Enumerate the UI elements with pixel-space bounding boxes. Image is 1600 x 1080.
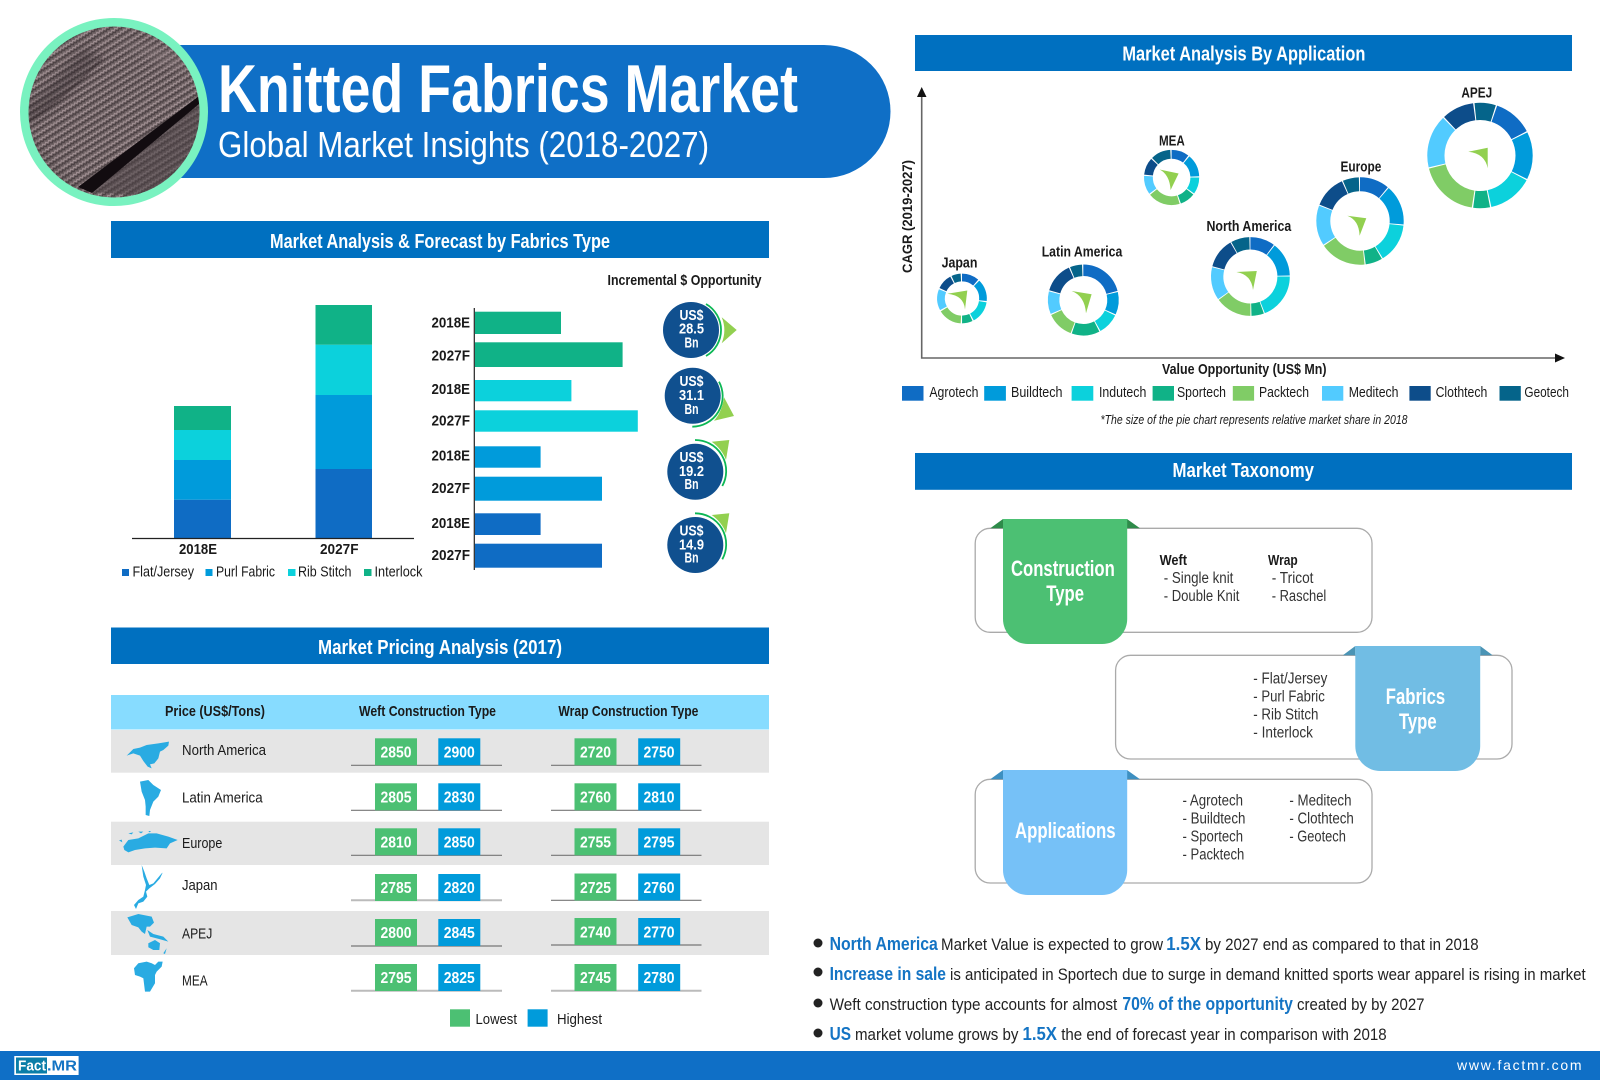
badge: US$ 19.2 Bn: 19.2 (679, 463, 704, 480)
badge: US$ 19.2 Bn (667, 440, 729, 500)
horizontal bar chart: 2027F (432, 480, 470, 497)
icon: Japan map (134, 865, 163, 909)
badge: US$ 28.5 Bn: US$ (680, 307, 704, 324)
insight 1 (814, 933, 1479, 954)
badge: US$ 19.2 Bn: US$ (680, 449, 704, 466)
insight 4 (814, 1023, 1387, 1044)
insight 4: US (830, 1023, 851, 1044)
taxonomy: construction type: Wrap (1268, 552, 1298, 569)
row: Japan: 2820 (444, 880, 475, 897)
title banner (150, 45, 890, 178)
row: MEA (134, 962, 701, 992)
horizontal bar chart: 2027F (432, 413, 470, 430)
stacked bar legend: Rib Stitch (298, 564, 352, 580)
taxonomy: construction type: Type (1046, 581, 1084, 606)
title: Knitted Fabrics Market (218, 51, 798, 127)
horizontal bar chart: 2018E (432, 448, 470, 465)
taxonomy: applications: - Buildtech (1182, 810, 1245, 827)
application legend: Indutech (1099, 384, 1146, 401)
row: North America: 2720 (580, 744, 611, 762)
key insights (814, 933, 1586, 1044)
y-axis label: CAGR (2019-2027) (900, 160, 915, 273)
taxonomy: construction type: Weft (1160, 552, 1187, 569)
row: Latin America: Latin America (182, 790, 263, 806)
application legend: Agrotech (929, 384, 978, 401)
label: Europe: Europe (1340, 158, 1381, 175)
row: Japan: Japan (182, 877, 218, 894)
subtitle: Global Market Insights (2018-2027) (218, 124, 709, 165)
taxonomy: fabrics type: Fabrics (1386, 684, 1445, 709)
donut: North America (1204, 230, 1297, 323)
row: Latin America (140, 780, 702, 816)
row: Europe: 2810 (380, 834, 412, 852)
taxonomy: applications: - Clothtech (1289, 810, 1354, 827)
taxonomy: construction type: Construction (1011, 556, 1115, 581)
taxonomy: fabrics type (1116, 646, 1512, 771)
section header: pricing analysis: Market Pricing Analysis (2017) (318, 637, 562, 659)
stacked bar chart: 2018E (179, 541, 217, 558)
row: MEA: MEA (182, 972, 208, 989)
table header row (111, 695, 769, 730)
taxonomy: fabrics type: - Rib Stitch (1253, 706, 1318, 723)
row: APEJ (111, 911, 769, 955)
row: North America: 2900 (444, 744, 475, 762)
badge: US$ 31.1 Bn (665, 368, 734, 427)
chart footnote: *The size of the pie chart represents relative market share in 2018 (1100, 413, 1408, 427)
taxonomy: applications: - Agrotech (1182, 793, 1243, 810)
horizontal bar chart: 2027F (432, 348, 470, 365)
table header row: Price (US$/Tons) (165, 703, 265, 720)
section header: by application: Market Analysis By Application (1122, 44, 1365, 66)
badge: US$ 19.2 Bn: Bn (684, 476, 698, 493)
stacked bar chart: 2027F (320, 541, 358, 558)
taxonomy: applications (975, 770, 1372, 895)
website: www.factmr.com (1456, 1057, 1582, 1073)
section header: taxonomy (915, 453, 1572, 490)
label: MEA: MEA (1159, 133, 1185, 150)
badge: US$ 14.9 Bn: Bn (684, 550, 698, 567)
taxonomy: construction type: - Raschel (1272, 588, 1326, 605)
stacked bar legend: Purl Fabric (216, 564, 275, 580)
insight 1: by 2027 end as compared to that in 2018 (1205, 935, 1479, 954)
row: Europe: Europe (182, 835, 222, 852)
section header: forecast by fabrics type: Market Analysis & Forecast by Fabrics Type (270, 231, 610, 253)
stacked bar legend: Flat/Jersey (132, 564, 194, 580)
pricing legend: Lowest (476, 1011, 518, 1028)
row: APEJ: 2800 (380, 925, 412, 942)
label: Japan: Japan (942, 255, 977, 272)
badge: US$ 14.9 Bn: 14.9 (679, 536, 704, 553)
badge: US$ 31.1 Bn: Bn (684, 401, 698, 418)
horizontal bar chart: 2018E (432, 381, 470, 398)
section header: taxonomy: Market Taxonomy (1172, 460, 1315, 482)
insight 4: market volume grows by (855, 1025, 1019, 1044)
logo: .MR (47, 1058, 77, 1074)
row: Europe (111, 822, 769, 865)
row: APEJ: 2740 (580, 924, 611, 942)
taxonomy: construction type: - Double Knit (1164, 588, 1240, 605)
insight 3: created by by 2027 (1297, 995, 1424, 1014)
insight 1: Market Value is expected to grow (941, 935, 1164, 954)
bubble chart (900, 85, 1565, 378)
taxonomy: fabrics type: - Interlock (1253, 724, 1313, 741)
chart axes (917, 87, 1565, 362)
row: MEA: 2825 (444, 970, 475, 987)
taxonomy: construction type (975, 519, 1372, 644)
insight 2: Increase in sale (830, 963, 946, 984)
row: North America: 2750 (644, 744, 675, 762)
row: Europe: 2795 (644, 834, 675, 852)
row: North America: 2850 (380, 744, 412, 762)
application legend: Geotech (1524, 384, 1569, 401)
row: Latin America: 2805 (380, 790, 412, 806)
badge: US$ 14.9 Bn: US$ (680, 523, 704, 540)
badge: US$ 28.5 Bn: 28.5 (679, 320, 704, 338)
donut: Latin America (1043, 260, 1123, 340)
stacked bar legend: Interlock (374, 564, 423, 580)
horizontal bar chart: 2018E (432, 314, 470, 332)
logo: Fact (18, 1058, 46, 1074)
pricing legend (450, 1009, 603, 1028)
icon: Europe map (119, 831, 178, 852)
row: Europe: 2850 (444, 834, 475, 852)
horizontal bar chart (432, 308, 638, 570)
insight 1: North America (830, 933, 938, 954)
row: Europe: 2755 (580, 834, 611, 852)
pricing legend: Highest (557, 1011, 603, 1028)
row: Japan: 2760 (644, 880, 675, 897)
table header row: Wrap Construction Type (558, 703, 698, 720)
row: Japan: 2725 (580, 880, 611, 897)
insight 4: the end of forecast year in comparison with 2018 (1061, 1025, 1387, 1044)
section header: forecast by fabrics type (111, 221, 769, 258)
row: North America: North America (182, 742, 267, 759)
application legend: Buildtech (1011, 384, 1062, 401)
insight 3: Weft construction type accounts for almost (830, 995, 1118, 1014)
label: APEJ: APEJ (1461, 85, 1492, 102)
row: MEA: 2780 (644, 970, 675, 987)
stacked bar chart (122, 305, 423, 580)
row: Japan: 2785 (380, 880, 412, 897)
taxonomy: construction type: - Tricot (1272, 570, 1314, 587)
insight 3: 70% of the opportunity (1122, 993, 1293, 1014)
icon: North America map (127, 742, 169, 768)
section header: pricing analysis (111, 628, 769, 664)
section header: by application (915, 35, 1572, 71)
application legend: Meditech (1349, 384, 1398, 401)
taxonomy: fabrics type: - Purl Fabric (1253, 689, 1325, 706)
row: Latin America: 2810 (644, 790, 675, 806)
taxonomy: applications: - Meditech (1289, 793, 1352, 810)
donut: Japan (932, 269, 992, 328)
bar 2018E (174, 406, 231, 538)
stacked bar legend (122, 564, 423, 580)
icon: Latin America map (140, 780, 161, 816)
row: APEJ: 2845 (444, 925, 475, 942)
row: Latin America: 2760 (580, 790, 611, 806)
taxonomy: applications: Applications (1015, 818, 1116, 843)
row: APEJ: APEJ (182, 926, 212, 943)
label: North America: North America (1206, 218, 1292, 235)
badge: US$ 14.9 Bn (667, 513, 729, 573)
horizontal bar chart: 2018E (432, 515, 470, 532)
icon: APEJ map (127, 914, 168, 954)
taxonomy: applications: - Sportech (1182, 829, 1243, 846)
badge: US$ 31.1 Bn: 31.1 (679, 387, 704, 404)
taxonomy: fabrics type: Type (1399, 709, 1437, 734)
application legend (902, 384, 1569, 401)
footer bar (0, 1051, 1600, 1080)
icon: MEA map (134, 962, 163, 992)
badge: US$ 28.5 Bn (663, 302, 737, 358)
row: Japan (134, 865, 701, 909)
insight 4: 1.5X (1022, 1023, 1058, 1044)
row: North America (111, 730, 769, 773)
badge: US$ 28.5 Bn: Bn (684, 334, 698, 352)
insight 3 (814, 993, 1424, 1014)
application legend: Packtech (1259, 384, 1309, 401)
row: MEA: 2745 (580, 970, 611, 987)
taxonomy: applications: - Packtech (1182, 846, 1244, 863)
taxonomy: fabrics type: - Flat/Jersey (1253, 671, 1328, 688)
horizontal bar chart: 2027F (432, 547, 470, 564)
incremental opportunity heading: Incremental $ Opportunity (608, 272, 762, 289)
row: MEA: 2795 (380, 970, 412, 987)
application legend: Sportech (1177, 384, 1226, 401)
donut: APEJ (1418, 93, 1542, 218)
application legend: Clothtech (1436, 384, 1487, 401)
logo (14, 1056, 79, 1075)
taxonomy: applications: - Geotech (1289, 829, 1346, 846)
table header row: Weft Construction Type (359, 703, 496, 720)
badge: US$ 31.1 Bn: US$ (680, 373, 704, 390)
label: Latin America: Latin America (1042, 244, 1123, 261)
pricing table (111, 695, 769, 992)
row: APEJ: 2770 (644, 924, 675, 942)
donut: MEA (1139, 145, 1204, 210)
x-axis label: Value Opportunity (US$ Mn) (1162, 361, 1327, 378)
taxonomy: construction type: - Single knit (1164, 570, 1234, 587)
row: Latin America: 2830 (444, 790, 475, 806)
donut: Europe (1308, 169, 1412, 273)
fabric photo in mint ring (20, 18, 208, 206)
bar 2027F (316, 305, 372, 538)
insight 1: 1.5X (1166, 933, 1202, 954)
